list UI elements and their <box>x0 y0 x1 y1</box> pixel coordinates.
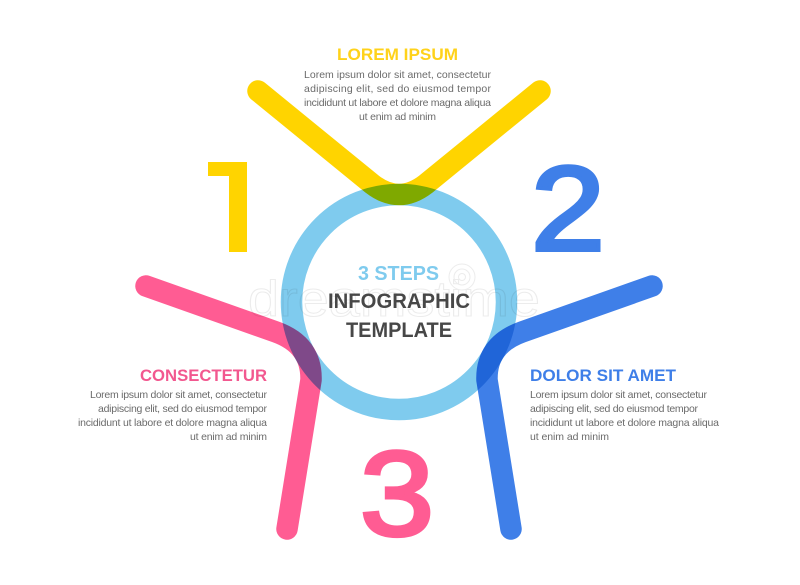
body: lorem ipsum: ut enim ad minim <box>359 111 436 123</box>
body: consectetur: ut enim ad minim <box>190 431 267 443</box>
blue elbow arm <box>487 286 652 529</box>
3 steps label: 3 STEPS <box>358 263 439 285</box>
body: consectetur: adipiscing elit, sed do eiusmod tempor <box>98 403 268 415</box>
infographic label: INFOGRAPHIC <box>328 290 470 313</box>
template label: TEMPLATE <box>346 319 452 342</box>
centre title <box>328 263 470 342</box>
body: dolor sit amet: Lorem ipsum dolor sit amet, consectetur <box>530 389 708 401</box>
heading: consectetur: CONSECTETUR <box>140 366 267 385</box>
centre ring <box>292 194 506 410</box>
body: lorem ipsum: adipiscing elit, sed do eiusmod tempor <box>304 83 492 95</box>
body: lorem ipsum: Lorem ipsum dolor sit amet, consectetur <box>304 69 492 81</box>
body: dolor sit amet: incididunt ut labore et dolore magna aliqua <box>530 417 719 429</box>
text block: lorem ipsum <box>304 45 492 123</box>
pink elbow arm <box>146 286 311 529</box>
numeral 2: 2 <box>531 142 605 276</box>
numeral 1: 1 <box>199 135 272 282</box>
body: consectetur <box>78 389 268 443</box>
heading: lorem ipsum: LOREM IPSUM <box>337 45 458 64</box>
body: dolor sit amet: adipiscing elit, sed do eiusmod tempor <box>530 403 698 415</box>
body: dolor sit amet: ut enim ad minim <box>530 431 609 443</box>
body: consectetur: Lorem ipsum dolor sit amet, consectetur <box>90 389 268 401</box>
heading: dolor sit amet: DOLOR SIT AMET <box>530 366 677 385</box>
numeral 1 <box>208 162 247 252</box>
watermark: dreamstime <box>248 271 540 327</box>
text block: dolor sit amet <box>530 366 719 443</box>
body: lorem ipsum: incididunt ut labore et dolore magna aliqua <box>304 97 491 109</box>
numeral 3: 3 <box>360 427 434 561</box>
text block: consectetur <box>78 366 268 443</box>
body: dolor sit amet <box>530 389 719 443</box>
body: consectetur: incididunt ut labore et dolore magna aliqua <box>78 417 267 429</box>
body: lorem ipsum <box>304 69 492 123</box>
yellow V arm <box>258 91 540 194</box>
